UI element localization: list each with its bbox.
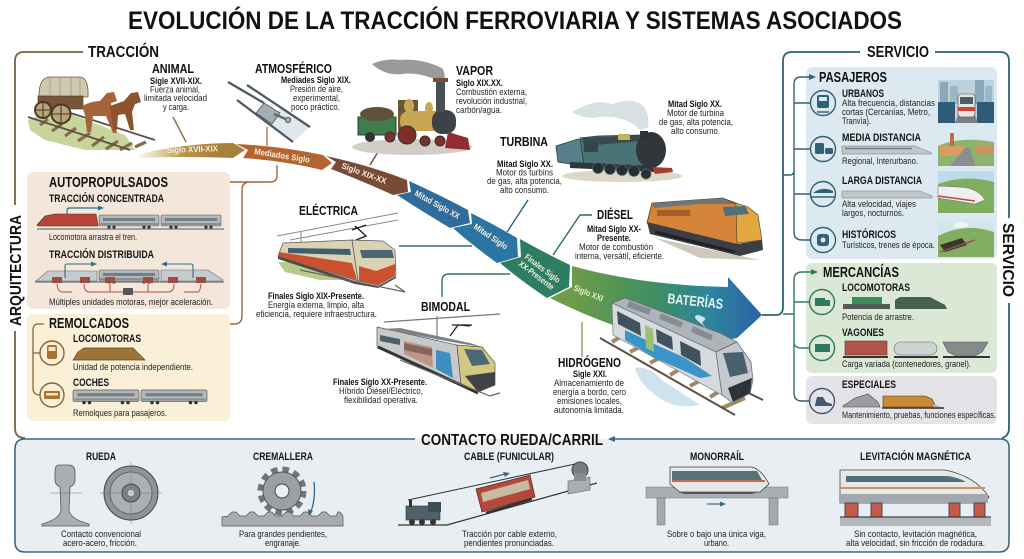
panel: mercancías — [783, 263, 997, 393]
subheading: especiales: ESPECIALES — [842, 379, 896, 391]
timeline labels: Mediados Siglo — [254, 146, 311, 165]
text: diésel: DIÉSEL — [597, 207, 633, 222]
text: animal — [144, 61, 207, 112]
subpanel: levitación magnética — [840, 450, 991, 548]
icon: larga distancia — [810, 182, 836, 206]
icon: coche circle — [40, 383, 64, 407]
subpanel: monorraíl: MONORRAÍL — [690, 450, 744, 463]
subpanel: cable funicular: pendientes pronunciadas. — [464, 538, 554, 548]
text: atmosférico — [255, 61, 351, 112]
text: eléctrica: Energía externa, limpio, alta — [268, 300, 364, 310]
branch lines — [783, 77, 812, 240]
heading: arquitectura: ARQUITECTURA — [8, 215, 25, 326]
text: múltiples unidades: Múltiples unidades motoras, mejor aceleración. — [49, 297, 213, 307]
subpanel: monorraíl: urbano. — [704, 538, 729, 548]
subheading: coches: COCHES — [73, 377, 109, 389]
image: urban scene — [938, 80, 994, 123]
timeline labels: Siglo XVII-XIX — [167, 143, 218, 155]
subpanel: levitación magnética: Sin contacto, levitación magnética, — [854, 529, 977, 539]
icon: locomotora circle — [40, 341, 64, 365]
subheading: locomotoras: LOCOMOTORAS — [73, 333, 141, 345]
icon: diesel locomotive — [647, 198, 763, 260]
panel: pasajeros — [783, 67, 997, 259]
text: larga distancia — [842, 175, 932, 218]
text: hidrógeno: Almacenamiento de — [554, 378, 624, 388]
text: urbanos: URBANOS — [842, 88, 884, 100]
text: atmosférico: Presión de aire, — [290, 84, 343, 94]
panel: remolcados — [27, 314, 230, 421]
text: hidrógeno — [553, 355, 626, 415]
timeline labels: XX-Presente — [517, 259, 557, 292]
text: atmosférico: Mediades Siglo XIX. — [281, 75, 351, 85]
text: bimodal: BIMODAL — [421, 299, 470, 314]
subpanel: rueda: Contacto convencional — [61, 529, 141, 539]
icon: coaches — [73, 390, 207, 404]
text: media distancia — [842, 132, 932, 166]
heading: mercancías: MERCANCÍAS — [823, 264, 899, 281]
subpanel: levitación magnética: alta velocidad, sin fricción de rodadura. — [846, 538, 985, 548]
icon: special vehicles — [843, 394, 945, 409]
text: vapor: Siglo XIX.XX. — [456, 78, 503, 88]
heading: pasajeros: PASAJEROS — [819, 70, 887, 86]
text: turbina right note — [659, 99, 733, 136]
bracket — [33, 324, 44, 395]
text: hidrógeno: energía a bordo, cero — [553, 387, 626, 397]
text: remolques: Remolques para pasajeros. — [73, 408, 167, 418]
text: vapor: VAPOR — [456, 63, 493, 78]
text: potencia: Potencia de arrastre. — [842, 312, 914, 322]
title: EVOLUCIÓN DE LA TRACCIÓN FERROVIARIA Y SISTEMAS ASOCIADOS — [128, 5, 902, 35]
text: bimodal: flexibilidad operativa. — [344, 395, 418, 405]
subheading: vagones: VAGONES — [842, 327, 884, 339]
icon: steam locomotive — [352, 60, 472, 155]
text: animal: y carga. — [163, 102, 189, 112]
text: turbina: TURBINA — [500, 134, 548, 149]
text: turbina right note: de gas, alta potencia, — [659, 117, 733, 127]
text: hidrógeno: Sigle XXI. — [573, 369, 607, 379]
icon: especiales circle — [810, 388, 834, 414]
branch line — [794, 393, 810, 401]
icon: electric train — [277, 213, 405, 292]
text: atmosférico: poco práctico. — [291, 102, 340, 112]
text: vapor: carbón/agua. — [456, 105, 502, 115]
text: hidrógeno: HIDRÓGENO — [558, 355, 621, 370]
timeline labels: Finales Siglo — [523, 252, 562, 285]
text: turbina: alto consumo. — [500, 185, 549, 195]
subpanel: rueda: RUEDA — [86, 451, 116, 463]
text: atmosférico: experimental, — [293, 93, 340, 103]
panel: contacto rueda/carril — [15, 432, 1009, 552]
text: atmosférico: ATMOSFÉRICO — [255, 61, 332, 76]
text: animal: limitada velocidad — [144, 93, 207, 103]
subpanel: rueda: acero-acero, fricción. — [63, 538, 137, 548]
timeline ribbon — [135, 143, 762, 345]
text: urbanos: Alta frecuencia, distancias — [842, 98, 935, 108]
icon: freight locomotives — [843, 297, 947, 309]
text: media distancia: MEDIA DISTANCIA — [842, 132, 921, 144]
icon: concentrated train — [37, 206, 224, 229]
subpanel: monorraíl — [646, 450, 788, 548]
subpanel: rueda — [42, 451, 162, 548]
text: unidad de potencia: Unidad de potencia independiente. — [73, 362, 193, 372]
text: carga: Carga variada (contenedores, granel). — [842, 359, 971, 369]
text: turbina right note: alto consumo. — [671, 126, 720, 136]
text: eléctrica — [256, 203, 377, 319]
frame: servicio — [762, 52, 1009, 438]
subpanel: cremallera: engranaje. — [265, 538, 301, 548]
text: larga distancia: LARGA DISTANCIA — [842, 175, 922, 187]
icon: animal traction wagon — [28, 77, 155, 150]
subpanel: levitación magnética: LEVITACIÓN MAGNÉTICA — [860, 450, 971, 463]
image: town scene — [938, 128, 994, 166]
timeline labels: Siglo XXI — [572, 283, 605, 303]
icon: bimodal train — [377, 314, 500, 396]
text: eléctrica: Finales Siglo XIX-Presente. — [268, 291, 364, 301]
subheading: locomotoras: LOCOMOTORAS — [842, 282, 910, 294]
text: locomotora arrastra: Locomotora arrastra el tren. — [49, 232, 137, 242]
text: hidrógeno: emisiones locales, — [557, 396, 622, 406]
text: vapor — [456, 63, 527, 115]
text: animal: Sigle XVII-XIX. — [150, 76, 202, 86]
text: urbanos: Tranvía). — [842, 116, 871, 126]
icon: battery train — [600, 298, 763, 415]
image: high speed scene — [938, 171, 994, 213]
panel: especiales — [794, 376, 997, 424]
text: eléctrica: ELÉCTRICA — [299, 203, 358, 218]
text: turbina — [487, 134, 562, 195]
panel: autopropulsados — [27, 172, 230, 309]
subpanel: cable funicular — [398, 451, 597, 548]
text: históricos: HISTÓRICOS — [842, 228, 896, 241]
icon: turbine locomotive — [556, 101, 682, 182]
icon: distributed train — [35, 262, 224, 295]
text: diésel: interna, versátil, eficiente. — [575, 251, 664, 261]
text: bimodal — [333, 299, 470, 405]
heading: servicio lateral: SERVICIO — [999, 223, 1016, 297]
subpanel: cremallera: Para grandes pendientes, — [239, 529, 327, 539]
text: urbanos: cortas (Cercanías, Metro, — [842, 107, 930, 117]
text: bimodal: Híbrido Diésel/Eléctrico, — [339, 386, 423, 396]
heading: autopropulsados: AUTOPROPULSADOS — [49, 174, 168, 191]
text: animal: ANIMAL — [152, 61, 194, 76]
text: bimodal: Finales Siglo XX-Presente. — [333, 377, 427, 387]
text: turbina: Motor ds turbins — [496, 168, 553, 178]
text: turbina: Mitad Siglo XX. — [497, 159, 553, 169]
timeline labels — [167, 143, 724, 312]
text: eléctrica: eficiencia, requiere infraestructura. — [256, 309, 377, 319]
icon: históricos — [810, 228, 836, 252]
text: diésel: Mitad Siglo XX- — [587, 224, 641, 234]
subpanel: cremallera — [222, 451, 343, 548]
subpanel: cable funicular: CABLE (FUNICULAR) — [464, 451, 554, 463]
timeline labels: Siglo XIX-XX — [340, 160, 388, 186]
subpanel: monorraíl: Sobre o bajo una única viga, — [667, 529, 766, 539]
text: históricos — [842, 228, 935, 250]
heading: remolcados: REMOLCADOS — [49, 315, 129, 332]
subheading: tracción concentrada: TRACCIÓN CONCENTRADA — [49, 192, 164, 205]
icon: vagones circle — [810, 336, 834, 360]
icon: atmospheric piston tube — [228, 82, 310, 142]
heading: servicio superior: SERVICIO — [867, 44, 929, 61]
text: media distancia: Regional, Interurbano. — [842, 156, 918, 166]
icon: urbanos — [810, 90, 836, 116]
frame: arquitectura — [15, 52, 83, 438]
text: diésel — [575, 207, 664, 261]
subheading: tracción distribuida: TRACCIÓN DISTRIBUIDA — [49, 248, 154, 261]
text: turbina right note: Mitad Siglo XX. — [668, 99, 722, 109]
text: diésel: Motor de combustión — [579, 242, 653, 252]
text: larga distancia: largos, nocturnos. — [842, 208, 904, 218]
text: urbanos — [842, 88, 935, 126]
heading: tracción: TRACCIÓN — [88, 42, 159, 61]
text: diésel: Presente. — [597, 233, 631, 243]
heading: contacto: CONTACTO RUEDA/CARRIL — [421, 432, 603, 449]
text: larga distancia: Alta velocidad, viajes — [842, 199, 916, 209]
icon: locomotoras freight — [810, 290, 834, 314]
text: turbina right note: Motor de turbina — [667, 108, 724, 118]
text: hidrógeno: autonomía limitada. — [554, 405, 624, 415]
text: animal: Fuerza animal, — [150, 84, 200, 94]
text: históricos: Turísticos, trenes de época. — [842, 240, 935, 250]
icon: wagons — [843, 341, 990, 357]
subpanel: cremallera: CREMALLERA — [253, 451, 313, 463]
branch lines — [783, 272, 814, 393]
image: historic scene — [938, 220, 994, 257]
timeline labels: BATERÍAS — [667, 290, 724, 312]
timeline labels: Mitad Siglo — [472, 221, 510, 251]
icon: brown locomotive — [73, 348, 145, 360]
text: turbina: de gas, alta potencia, — [487, 176, 562, 186]
timeline labels: Mitad Siglo XX — [413, 188, 462, 221]
connector lines — [135, 117, 592, 357]
text: vapor: revolución industrial, — [456, 96, 527, 106]
subpanel: cable funicular: Tracción por cable externo, — [462, 529, 557, 539]
text: vapor: Combustión externa, — [456, 87, 527, 97]
icon: media distancia — [810, 136, 836, 162]
